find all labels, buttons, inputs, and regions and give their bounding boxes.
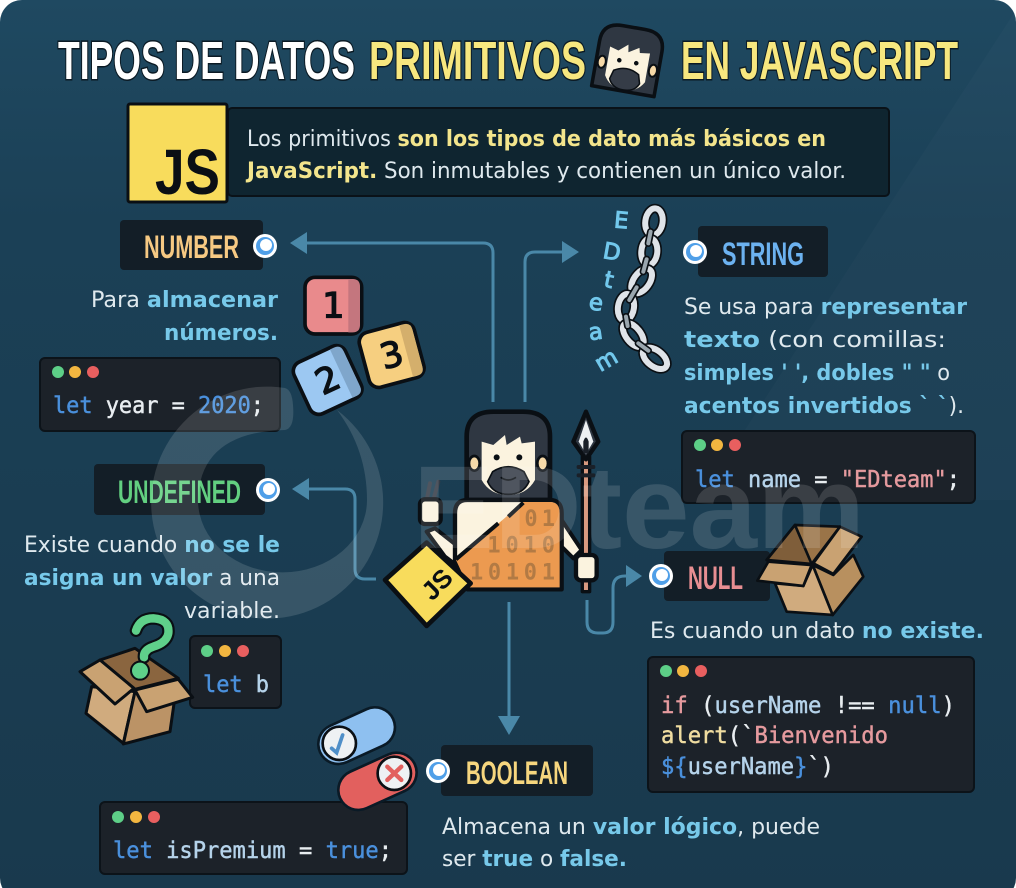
number code block xyxy=(40,358,280,431)
watermark: EDteam logo xyxy=(151,387,865,619)
string code block xyxy=(682,431,975,503)
boolean tag: BOOLEAN xyxy=(466,755,568,791)
icon: JS logo xyxy=(128,104,227,208)
icon: number blocks: 1 xyxy=(322,286,344,326)
icon: toggles xyxy=(323,727,411,790)
string description: texto (con comillas: xyxy=(684,328,946,353)
icon: chain with EDteam letters xyxy=(587,207,671,377)
boolean description: Almacena un valor lógico, puede xyxy=(442,815,820,840)
JS badge: JS xyxy=(415,562,459,606)
number tag: NUMBER xyxy=(144,229,239,265)
null bullet xyxy=(649,564,673,588)
null tag xyxy=(664,551,770,601)
icon: chain with EDteam letters: a xyxy=(587,319,604,346)
icon: chain with EDteam letters: e xyxy=(587,289,605,317)
undefined description: variable. xyxy=(184,599,280,624)
arrow: to boolean xyxy=(498,602,520,735)
null code block xyxy=(648,657,974,792)
number description: números. xyxy=(164,321,278,346)
string bullet xyxy=(683,240,707,264)
icon: chain with EDteam letters: m xyxy=(590,344,623,377)
string description: Se usa para representar xyxy=(684,295,967,320)
boolean code block: let isPremium = true; xyxy=(113,838,392,864)
number code block: let year = 2020; xyxy=(53,393,264,419)
arrow: to undefined xyxy=(292,478,376,579)
icon: title avatar xyxy=(592,22,665,97)
arrow: to string xyxy=(525,241,579,402)
panel: string xyxy=(682,226,975,503)
icon: chain with EDteam letters: D xyxy=(601,238,623,267)
intro panel xyxy=(228,108,889,196)
body tunic with binary digits: 10101 xyxy=(470,561,555,586)
intro text: Los primitivos son los tipos de dato más básicos en xyxy=(247,127,826,152)
number description xyxy=(91,288,278,346)
panel: boolean xyxy=(100,745,820,874)
string code block: let name = "EDteam"; xyxy=(695,467,960,493)
intro text xyxy=(245,127,846,184)
undefined description: asigna un valor a una xyxy=(24,566,280,591)
icon: chain with EDteam letters: t xyxy=(602,267,616,294)
icon: JS logo: JS xyxy=(155,136,220,208)
title: TIPOS DE DATOS xyxy=(58,31,355,91)
undefined bullet xyxy=(256,478,280,502)
icon: chain with EDteam letters: E xyxy=(613,207,630,235)
boolean bullet xyxy=(426,759,450,783)
icon: number blocks xyxy=(290,277,426,418)
null tag: NULL xyxy=(688,560,743,596)
null code block: ${userName}`) xyxy=(661,754,834,780)
title: PRIMITIVOS xyxy=(369,31,586,91)
title xyxy=(58,31,958,91)
JS badge xyxy=(385,543,471,626)
undefined description xyxy=(24,533,280,624)
icon: question box xyxy=(80,618,193,744)
left arm and hand xyxy=(420,482,458,567)
undefined tag xyxy=(94,464,265,515)
panel: null xyxy=(648,551,984,792)
spear xyxy=(573,412,598,592)
null code block: alert(`Bienvenido xyxy=(661,723,888,749)
icon: number blocks: 3 xyxy=(376,334,408,378)
string description: acentos invertidos ` `). xyxy=(684,394,964,419)
watermark: EDteam logo: EDteam xyxy=(413,442,865,574)
icon: null box xyxy=(757,525,863,615)
panel: number xyxy=(40,220,280,431)
body tunic with binary digits: 01 xyxy=(524,507,555,532)
body tunic with binary digits xyxy=(455,500,562,589)
string tag xyxy=(698,226,828,277)
undefined code block: let b xyxy=(203,672,269,698)
head xyxy=(467,412,550,500)
right arm and hand xyxy=(562,520,597,580)
boolean description: ser true o false. xyxy=(442,847,627,872)
arrow: to number xyxy=(290,232,493,402)
undefined description: Existe cuando no se le xyxy=(24,533,280,558)
number description: Para almacenar xyxy=(91,288,278,313)
null code block: if (userName !== null) xyxy=(661,693,955,719)
string description xyxy=(684,295,967,419)
undefined tag: UNDEFINED xyxy=(118,474,241,510)
number bullet xyxy=(253,234,277,258)
intro text: JavaScript. Son inmutables y contienen un único valor. xyxy=(245,159,846,184)
boolean code block xyxy=(100,802,407,874)
number tag xyxy=(120,220,263,270)
icon: number blocks: 2 xyxy=(310,358,347,404)
body tunic with binary digits: 1010 xyxy=(487,534,555,559)
arrow: to null xyxy=(587,565,642,633)
boolean tag xyxy=(441,745,593,796)
string description: simples ' ', dobles " " o xyxy=(684,361,950,386)
panel: undefined xyxy=(24,464,281,708)
undefined code block xyxy=(190,636,281,708)
central character xyxy=(385,412,598,626)
null description: Es cuando un dato no existe. xyxy=(650,619,984,644)
boolean description xyxy=(442,815,820,872)
string tag: STRING xyxy=(722,236,804,272)
